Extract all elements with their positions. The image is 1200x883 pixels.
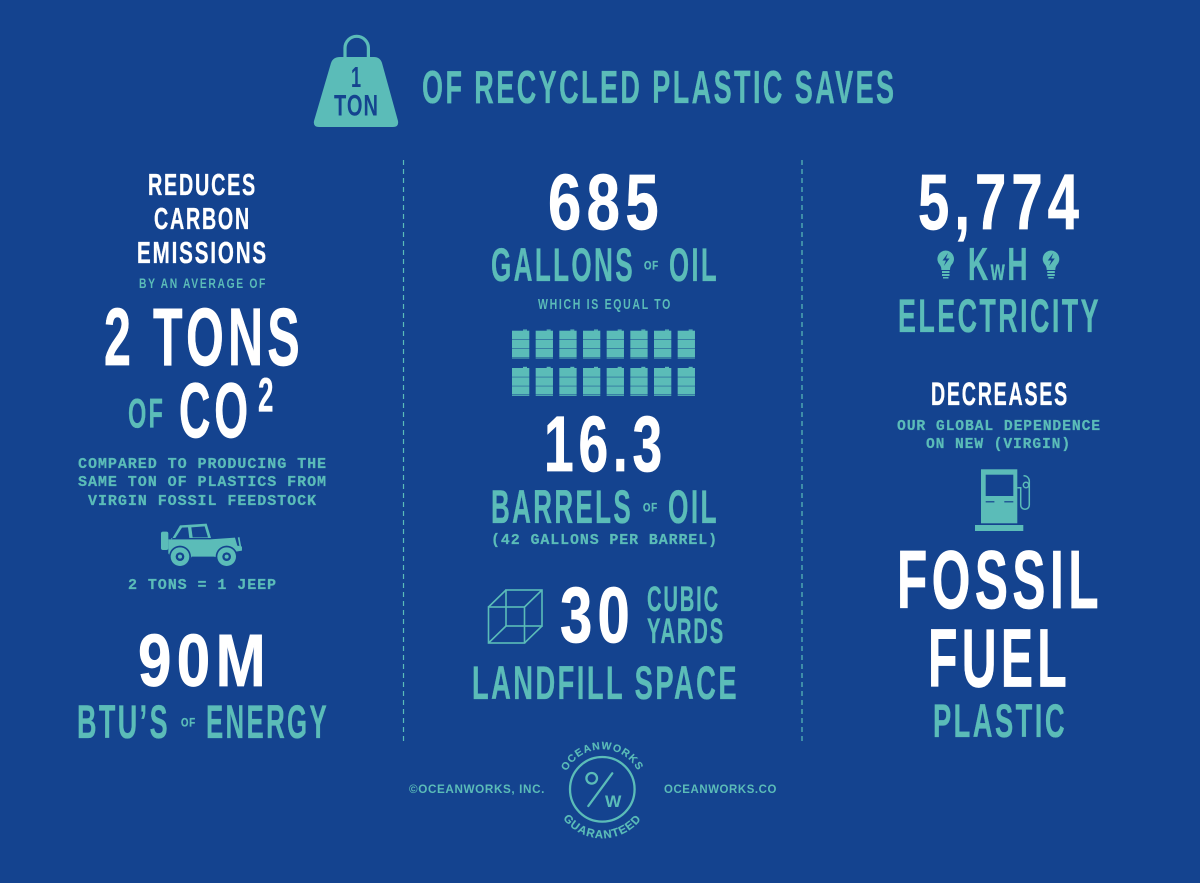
label: kWh with bulbs <box>937 238 1059 290</box>
label: gallons of oil: OF <box>644 260 659 272</box>
label: cubic yards: YARDS <box>647 612 725 651</box>
text: website: OCEANWORKS.CO <box>664 784 777 796</box>
text: global dependence: OUR GLOBAL DEPENDENCE <box>897 418 1101 435</box>
label: kWh with bulbs: KwH <box>968 238 1030 290</box>
stat: fossil fuel: FUEL <box>928 612 1071 705</box>
text: compared to virgin feedstock <box>78 456 327 510</box>
icon: left bulb <box>937 250 954 278</box>
label: 2 tons = 1 jeep: 2 TONS = 1 JEEP <box>128 577 277 594</box>
label: BTU's of energy <box>77 695 329 748</box>
label: barrels of oil: BARRELS <box>491 480 633 533</box>
icon: one ton weight: 1 <box>351 62 362 94</box>
heading: decreases: DECREASES <box>931 376 1069 412</box>
dashed column dividers <box>404 160 802 742</box>
logo: oceanworks guaranteed: GUARANTEED <box>564 815 640 838</box>
stat: 2 tons: 2 TONS <box>104 292 304 383</box>
label: BTU's of energy: OF <box>181 718 196 730</box>
stat: of CO2: OF <box>128 390 165 436</box>
panel: electricity and fossil fuel <box>897 157 1103 747</box>
icon: jeep <box>161 524 242 568</box>
icon: right bulb <box>1043 250 1059 278</box>
label: landfill space: LANDFILL SPACE <box>472 656 739 709</box>
label: gallons per barrel: (42 GALLONS PER BARREL) <box>491 532 718 549</box>
text: compared to virgin feedstock: SAME TON OF PLASTICS FROM <box>78 474 327 491</box>
stat: 30: 30 <box>560 570 635 659</box>
icon: one ton weight <box>314 36 398 127</box>
stat: of CO2 <box>128 366 276 454</box>
stat: 5,774: 5,774 <box>918 157 1084 246</box>
label: gallons of oil: GALLONS <box>491 238 635 291</box>
text: compared to virgin feedstock: COMPARED TO PRODUCING THE <box>78 456 327 473</box>
label: plastic: PLASTIC <box>933 694 1067 747</box>
stat: 16.3: 16.3 <box>544 399 667 488</box>
icon: cube <box>488 590 542 643</box>
label: cubic yards <box>647 580 725 651</box>
logo: oceanworks guaranteed: OCEANWORKS <box>562 742 643 770</box>
label: which is equal to: WHICH IS EQUAL TO <box>538 296 672 313</box>
label: barrels of oil: OF <box>643 502 658 514</box>
logo: oceanworks guaranteed <box>562 742 643 838</box>
label: cubic yards: CUBIC <box>647 580 720 619</box>
label: barrels of oil: OIL <box>668 480 719 533</box>
label: gallons of oil: OIL <box>669 238 719 291</box>
logo: oceanworks guaranteed: W <box>605 792 622 811</box>
heading: reduces carbon emissions: CARBON <box>154 201 251 236</box>
header <box>314 36 896 127</box>
heading: reduces carbon emissions <box>137 167 268 270</box>
heading: reduces carbon emissions: REDUCES <box>148 167 257 202</box>
panel: carbon emissions and energy <box>77 167 329 748</box>
text: compared to virgin feedstock: VIRGIN FOSSIL FEEDSTOCK <box>88 493 317 510</box>
icon: barrels <box>512 330 695 396</box>
stat: of CO2: 2 <box>258 370 276 422</box>
stat: fossil fuel <box>897 533 1103 705</box>
heading: reduces carbon emissions: EMISSIONS <box>137 235 268 270</box>
stat: 685: 685 <box>548 157 664 246</box>
label: by an average of: BY AN AVERAGE OF <box>139 276 267 291</box>
label: BTU's of energy: ENERGY <box>206 695 329 748</box>
footer <box>409 742 777 838</box>
label: BTU's of energy: BTU’S <box>77 695 170 748</box>
text: copyright: ©OCEANWORKS, INC. <box>409 784 545 796</box>
icon: one ton weight: TON <box>334 90 379 122</box>
stat: of CO2: CO <box>179 366 252 454</box>
panel: oil and landfill <box>472 157 739 709</box>
text: global dependence: ON NEW (VIRGIN) <box>926 436 1071 453</box>
text: global dependence <box>897 418 1101 453</box>
stat: 90M: 90M <box>138 619 271 702</box>
icon: fuel pump <box>975 469 1029 531</box>
